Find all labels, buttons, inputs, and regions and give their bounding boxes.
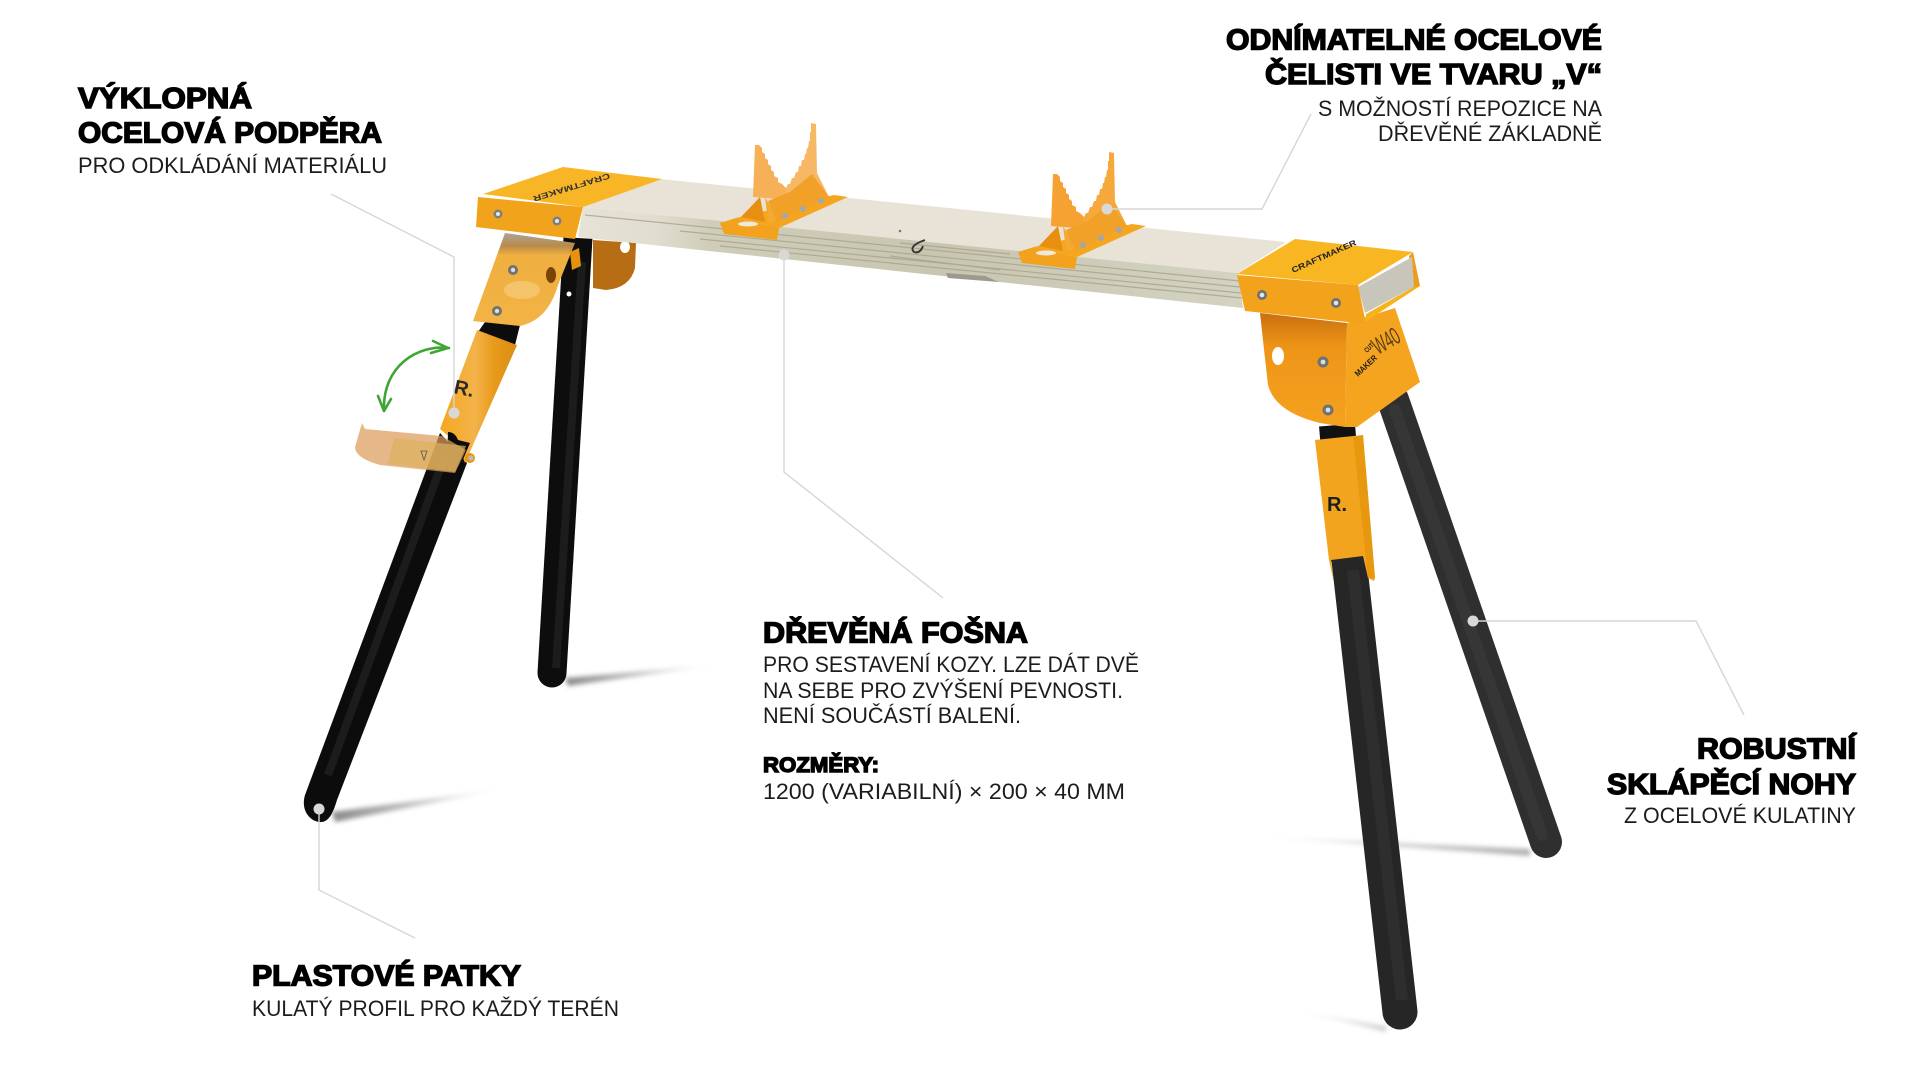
description: S MOŽNOSTÍ REPOZICE NA: [1318, 96, 1602, 121]
front left leg: [304, 322, 520, 822]
description: NENÍ SOUČÁSTÍ BALENÍ.: [763, 703, 1021, 728]
right steel sleeve: R.: [1327, 494, 1347, 516]
heading: ROBUSTNÍ: [1697, 734, 1857, 766]
description: [763, 652, 1139, 728]
front right leg: [1337, 425, 1402, 1012]
description: KULATÝ PROFIL PRO KAŽDÝ TERÉN: [252, 996, 619, 1021]
leader line: [314, 804, 415, 938]
dimensions: 1200 (VARIABILNÍ) × 200 × 40 MM: [763, 779, 1125, 804]
heading: ODNÍMATELNÉ OCELOVÉ: [1226, 24, 1602, 56]
dimensions: ROZMĚRY:: [763, 753, 879, 777]
description: NA SEBE PRO ZVÝŠENÍ PEVNOSTI.: [763, 678, 1123, 703]
callout: folding legs: [1468, 616, 1857, 828]
description: [1318, 96, 1602, 146]
callout: wooden plank: [763, 250, 1139, 804]
heading: ČELISTI VE TVARU „V“: [1265, 58, 1602, 91]
wooden plank: [578, 179, 1286, 308]
description: Z OCELOVÉ KULATINY: [1624, 803, 1856, 828]
green swing arrow: [378, 341, 449, 411]
right steel sleeve: [1315, 435, 1375, 583]
leader line: [1102, 114, 1311, 214]
right leg plate: CUT: [1363, 342, 1376, 354]
description: PRO ODKLÁDÁNÍ MATERIÁLU: [78, 153, 387, 178]
heading: SKLÁPĚCÍ NOHY: [1607, 769, 1856, 801]
rear left leg: [538, 238, 582, 688]
rear left hinge plate: [593, 240, 636, 290]
leader line: [1468, 616, 1744, 715]
flip-out support shelf: [355, 423, 466, 473]
front left steel sleeve: R.: [452, 376, 476, 402]
jaw: right V-jaw: [1018, 152, 1146, 269]
front left steel sleeve: [440, 330, 517, 465]
heading: [78, 83, 382, 150]
rear right leg: [1393, 400, 1546, 842]
dimensions: [763, 753, 1125, 804]
jaw: left V-jaw: [720, 123, 848, 240]
left leg plate: [473, 233, 581, 326]
heading: OCELOVÁ PODPĚRA: [78, 118, 382, 150]
left end bracket: CRAFTMAKER: [532, 171, 611, 203]
heading: [1607, 734, 1857, 801]
heading: PLASTOVÉ PATKY: [252, 960, 521, 992]
callout: plastic feet: [252, 804, 619, 1021]
description: DŘEVĚNÉ ZÁKLADNĚ: [1378, 121, 1602, 146]
left end bracket: [476, 167, 662, 239]
right leg plate: MAKER: [1353, 353, 1379, 378]
heading: VÝKLOPNÁ: [78, 83, 252, 115]
right leg plate: W40: [1368, 323, 1405, 360]
heading: DŘEVĚNÁ FOŠNA: [763, 616, 1028, 650]
callout: tilting steel support: [78, 83, 460, 418]
leader line: [778, 250, 943, 598]
leader line: [331, 194, 460, 418]
callout: removable steel V jaws: [1102, 24, 1602, 214]
right end bracket: CRAFTMAKER: [1290, 238, 1358, 275]
sawhorse product illustration: [304, 123, 1546, 1012]
heading: [1226, 24, 1602, 91]
floor shadows: [332, 664, 1530, 1032]
right leg plate: [1260, 308, 1420, 427]
description: PRO SESTAVENÍ KOZY. LZE DÁT DVĚ: [763, 652, 1139, 677]
right end bracket: [1237, 238, 1420, 324]
